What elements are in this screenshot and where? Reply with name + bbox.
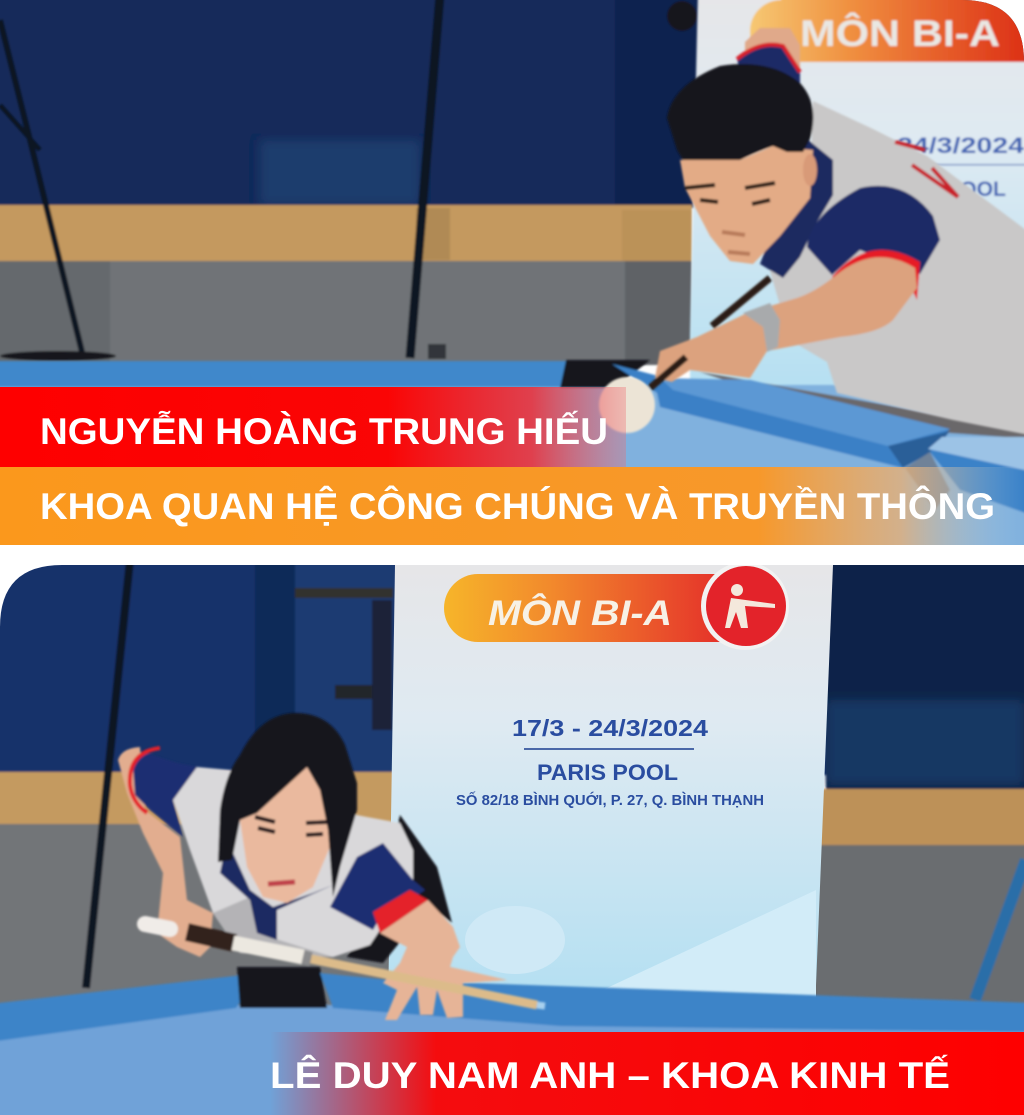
right sleeve trim bbox=[373, 890, 428, 933]
banner bbox=[388, 562, 833, 1010]
banner logo pill bbox=[444, 562, 789, 650]
male player bbox=[599, 28, 1024, 436]
left arm bbox=[118, 747, 213, 957]
lips bbox=[268, 882, 295, 884]
ear bbox=[803, 154, 817, 186]
eyes and brows bbox=[685, 183, 775, 204]
face bbox=[240, 767, 333, 903]
banner date: 17/3 - 24/3/2024 bbox=[512, 715, 708, 741]
collar bbox=[760, 139, 833, 278]
panel: bottom photo of female player bbox=[0, 555, 1024, 1115]
left sleeve trim bbox=[130, 748, 160, 813]
name text: LÊ DUY NAM ANH – KHOA KINH TẾ bbox=[270, 1054, 950, 1096]
right arm bbox=[380, 900, 507, 1020]
banner title: MÔN BI-A bbox=[488, 593, 672, 633]
banner behind player bbox=[690, 0, 1024, 410]
lower shirt shading bbox=[213, 897, 333, 957]
name text: NGUYỄN HOÀNG TRUNG HIẾU bbox=[40, 410, 608, 452]
eyes and brows bbox=[255, 817, 328, 835]
left sleeve bbox=[133, 752, 197, 837]
shirt bbox=[173, 767, 413, 957]
cue stick bbox=[145, 924, 545, 1006]
sleeve bbox=[807, 186, 940, 275]
faculty band orange bbox=[0, 467, 1024, 545]
banner date: 24/3/2024 bbox=[897, 133, 1024, 158]
watch bbox=[743, 303, 780, 352]
photo background: venue wall bbox=[0, 555, 1024, 1020]
name band red bbox=[0, 387, 626, 467]
face bbox=[680, 146, 813, 264]
hair bbox=[667, 64, 813, 160]
cue behind hand bbox=[712, 278, 770, 326]
cue ball bbox=[599, 377, 655, 433]
sleeve trim bbox=[832, 250, 920, 300]
raised sleeve trim bbox=[737, 45, 800, 72]
shirt bbox=[770, 101, 1024, 436]
raised sleeve bbox=[737, 45, 800, 90]
name band bbox=[270, 1032, 1024, 1115]
panel: top photo of male player bbox=[0, 0, 1024, 555]
shirt logo bbox=[895, 142, 958, 197]
banner address: SỐ 82/18 BÌNH QUỚI, P. 27, Q. BÌNH THẠNH bbox=[456, 791, 764, 809]
arm bbox=[655, 257, 917, 382]
banner venue: PARIS POOL bbox=[537, 760, 678, 785]
photo background: venue wall bbox=[0, 0, 1024, 365]
icon: billiard player bbox=[725, 584, 775, 628]
female player bbox=[118, 713, 545, 1020]
black under shirt bbox=[347, 815, 452, 963]
faculty text: KHOA QUAN HỆ CÔNG CHÚNG VÀ TRUYỀN THÔNG bbox=[40, 485, 995, 527]
banner venue: POOL bbox=[946, 178, 1006, 201]
banner title: MÔN BI-A bbox=[800, 12, 1000, 54]
nose and mouth shadow bbox=[722, 232, 750, 254]
placket bbox=[220, 840, 333, 940]
front cue bbox=[650, 357, 686, 388]
hair bbox=[218, 713, 357, 897]
fingers over rail bbox=[425, 967, 507, 983]
right sleeve bbox=[330, 843, 425, 930]
raised arm bbox=[745, 28, 800, 70]
pool table bbox=[0, 360, 1024, 555]
pool table bbox=[0, 967, 1024, 1115]
